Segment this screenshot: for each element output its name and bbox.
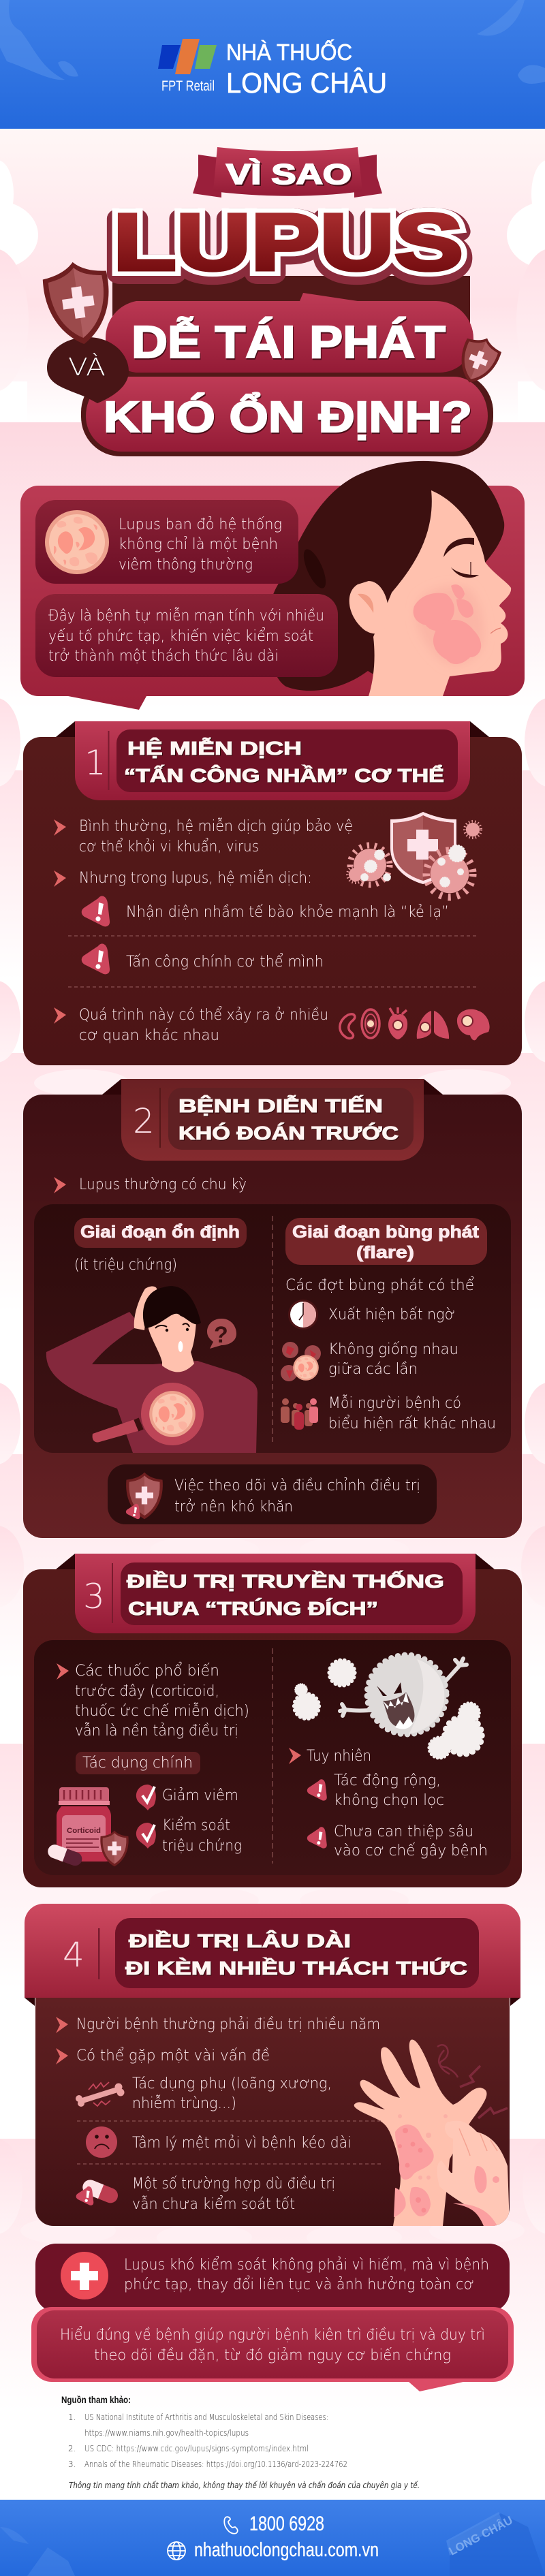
item: fatigue: Tâm lý mệt mỏi vì bệnh kéo dài	[132, 2135, 352, 2152]
banner: Khó ổn định	[81, 373, 493, 456]
bubble: Và	[47, 337, 129, 403]
intro panel	[20, 461, 525, 710]
flare stage label	[285, 1218, 487, 1265]
ribbon: Vì sao: VÌ SAO	[226, 158, 352, 190]
phone contact	[224, 2513, 324, 2535]
text box: autoimmune: trở thành một thách thức lâu dài	[48, 648, 279, 665]
illustration: confused man with magnifier	[46, 1286, 258, 1453]
bullet: common drugs: vẫn là nền tảng điều trị	[75, 1723, 238, 1740]
website contact: nhathuoclongchau.com.vn	[194, 2539, 379, 2561]
section 4 heading: ĐIỀU TRỊ LÂU DÀI	[129, 1930, 351, 1951]
section 3 panel	[23, 1554, 522, 1887]
bullet: organs	[54, 1006, 328, 1044]
section 1 panel	[23, 721, 522, 1065]
section 2 heading: BỆNH DIỄN TIẾN	[178, 1095, 383, 1116]
warning: not deep: Chưa can thiệp sâu	[334, 1823, 473, 1840]
conclusion box: understanding	[31, 2307, 514, 2391]
references: Annals of the Rheumatic Diseases: https://doi.org/10.1136/ard-2023-224762	[84, 2460, 347, 2469]
icon: corticoid bottle	[46, 1787, 129, 1868]
comparison panel	[34, 1204, 511, 1453]
treatment panel	[34, 1640, 511, 1875]
text box: definition: viêm thông thường	[119, 556, 253, 574]
banner: Dễ tái phát	[106, 293, 473, 373]
text box: definition: không chỉ là một bệnh	[119, 536, 278, 553]
icon: small shield	[452, 331, 505, 390]
section 4 heading: 4	[63, 1935, 84, 1975]
bullet: however: Tuy nhiên	[307, 1748, 371, 1765]
footer band	[0, 2500, 545, 2576]
text box: definition	[35, 500, 298, 584]
references: US CDC: https://www.cdc.gov/lupus/signs-symptoms/index.html	[84, 2444, 309, 2453]
references: 3.	[68, 2460, 76, 2469]
warning: not deep	[307, 1823, 488, 1859]
stable stage label: Giai đoạn ổn định	[80, 1223, 240, 1242]
effect: anti-inflammatory	[136, 1785, 238, 1810]
phone contact: 1800 6928	[249, 2513, 324, 2535]
effect: symptom control: Kiểm soát	[162, 1817, 230, 1834]
illustration: immune cell monster	[294, 1655, 482, 1758]
ribbon: Vì sao	[193, 147, 382, 198]
text box: autoimmune: Đây là bệnh tự miễn mạn tính với nhiều	[48, 608, 324, 625]
item: poor control: vẫn chưa kiểm soát tốt	[132, 2195, 295, 2213]
label: main effects: Tác dụng chính	[82, 1755, 193, 1772]
bullet: cycle: Lupus thường có chu kỳ	[79, 1176, 247, 1193]
illustration: hands with rash	[354, 2039, 510, 2226]
logo: FPT Retail: FPT Retail	[161, 78, 215, 94]
conclusion box: understanding: Hiểu đúng về bệnh giúp người bệnh kiên trì điều trị và duy trì	[60, 2326, 485, 2344]
item: side effects: Tác dụng phụ (loãng xương,	[132, 2075, 332, 2092]
conclusion box: complex disease	[35, 2244, 510, 2312]
callout: follow-up difficult: Việc theo dõi và điều chỉnh điều trị	[174, 1477, 420, 1494]
bubble: Và: VÀ	[68, 353, 106, 381]
section 1 heading: “TẤN CÔNG NHẦM” CƠ THỂ	[124, 764, 444, 786]
bullet: organs: Quá trình này có thể xảy ra ở nhiều	[79, 1006, 328, 1024]
effect: symptom control: triệu chứng	[162, 1838, 242, 1855]
conclusion box: complex disease: phức tạp, thay đổi liên tục và ảnh hưởng toàn cơ	[124, 2276, 474, 2293]
logo: FPT Retail	[158, 39, 217, 94]
flare stage label: Giai đoạn bùng phát	[292, 1223, 480, 1242]
banner: Dễ tái phát: DỄ TÁI PHÁT	[131, 317, 446, 368]
bullet: common drugs: trước đây (corticoid,	[75, 1683, 219, 1700]
section 4 heading: ĐI KÈM NHIỀU THÁCH THỨC	[125, 1958, 467, 1979]
magnifier	[93, 1383, 204, 1445]
section 4 panel	[25, 1904, 520, 2226]
stable stage label	[74, 1218, 247, 1248]
section 4 heading	[25, 1904, 520, 1998]
banner: Khó ổn định: KHÓ ỔN ĐỊNH?	[104, 392, 472, 441]
item: different per patient	[281, 1395, 496, 1432]
LUPUS word: LUPUS	[113, 198, 463, 287]
warning: attack: Tấn công chính cơ thể mình	[126, 953, 324, 971]
section 3 heading: CHƯA “TRÚNG ĐÍCH”	[128, 1598, 378, 1619]
bullet: protection	[54, 818, 353, 855]
references: Thông tin mang tính chất tham khảo, không thay thế lời khuyên và chẩn đoán của chuyên gia y tế.	[69, 2481, 420, 2490]
item: varies: Không giống nhau	[328, 1341, 458, 1358]
item: side effects	[76, 2075, 332, 2112]
icon: skin rash	[45, 510, 109, 574]
references: Nguồn tham khảo:	[61, 2395, 131, 2405]
section 2 heading: 2	[133, 1101, 155, 1141]
icon: corticoid bottle: Corticoid	[67, 1827, 101, 1835]
item: different per patient: Mỗi người bệnh có	[328, 1395, 461, 1412]
item: poor control: Một số trường hợp dù điều trị	[132, 2176, 335, 2193]
warning: misidentify	[82, 896, 449, 926]
label: main effects	[76, 1752, 200, 1774]
flare intro text: Các đợt bùng phát có thể	[285, 1276, 474, 1294]
item: different per patient: biểu hiện rất khác nhau	[328, 1415, 496, 1432]
item: poor control	[76, 2176, 335, 2213]
effect: symptom control	[136, 1817, 242, 1855]
item: sudden onset: Xuất hiện bất ngờ	[328, 1306, 455, 1323]
text box: definition: Lupus ban đỏ hệ thống	[119, 516, 282, 533]
conclusion box: complex disease: Lupus khó kiểm soát không phải vì hiếm, mà vì bệnh	[124, 2256, 489, 2274]
effect: anti-inflammatory: Giảm viêm	[162, 1787, 238, 1804]
bullet: organs: cơ quan khác nhau	[79, 1027, 219, 1044]
item: fatigue	[86, 2126, 352, 2158]
section 3 heading: ĐIỀU TRỊ TRUYỀN THỐNG	[127, 1570, 444, 1592]
references: US National Institute of Arthritis and Musculoskeletal and Skin Diseases:	[84, 2413, 328, 2422]
warning: broad effect: Tác động rộng,	[334, 1772, 441, 1789]
callout: follow-up difficult: trở nên khó khăn	[174, 1498, 293, 1515]
header band	[0, 0, 545, 129]
section 2 panel	[23, 1079, 522, 1538]
bullet: problems: Có thể gặp một vài vấn đề	[76, 2047, 270, 2064]
warning: broad effect	[307, 1772, 444, 1809]
bullet: in lupus: Nhưng trong lupus, hệ miễn dịch:	[79, 870, 312, 887]
section 1 heading	[75, 721, 470, 800]
bullet: common drugs: Các thuốc phổ biến	[75, 1662, 219, 1680]
icons: organs	[340, 1007, 490, 1040]
LUPUS word: LUPUS	[113, 202, 463, 292]
LUPUS word: LUPUS	[113, 198, 463, 287]
illustration: shield and viruses	[347, 812, 481, 897]
flare stage label: (flare)	[356, 1243, 414, 1262]
item: varies	[281, 1341, 458, 1381]
warning: broad effect: không chọn lọc	[334, 1792, 444, 1809]
bullet: protection: cơ thể khỏi vi khuẩn, virus	[79, 838, 259, 855]
logo: Nhà thuốc Long Châu	[226, 39, 387, 99]
conclusion box: understanding: theo dõi đều đặn, từ đó giảm nguy cơ biến chứng	[94, 2347, 451, 2364]
warning: not deep: vào cơ chế gây bệnh	[334, 1842, 488, 1859]
dark backing block	[112, 276, 470, 381]
icon: medical cross	[61, 2252, 108, 2299]
bullet: long treatment: Người bệnh thường phải điều trị nhiều năm	[76, 2016, 380, 2033]
section 2 heading	[121, 1079, 424, 1161]
item: side effects: nhiễm trùng...)	[132, 2095, 236, 2112]
item: sudden onset	[288, 1300, 455, 1330]
section 1 heading: 1	[84, 743, 106, 783]
icon: large shield	[40, 257, 116, 349]
references: 2.	[68, 2444, 76, 2453]
stable stage note: (ít triệu chứng)	[74, 1257, 177, 1274]
warning: misidentify: Nhận diện nhầm tế bào khỏe mạnh là “kẻ lạ”	[126, 904, 449, 921]
warning: attack	[82, 943, 324, 974]
logo: Nhà thuốc Long Châu: NHÀ THUỐC	[226, 39, 352, 65]
section 3 heading	[75, 1554, 476, 1633]
section 1 heading: HỆ MIỄN DỊCH	[127, 738, 302, 759]
logo: Nhà thuốc Long Châu: LONG CHÂU	[226, 67, 387, 99]
icon: question bubble	[207, 1319, 236, 1349]
bullet: protection: Bình thường, hệ miễn dịch giúp bảo vệ	[79, 818, 353, 835]
references: 1.	[68, 2413, 76, 2422]
bullet: common drugs: thuốc ức chế miễn dịch)	[75, 1703, 249, 1720]
text box: autoimmune: yếu tố phức tạp, khiến việc kiểm soát	[48, 627, 313, 645]
storefront sign: LONG CHÂU	[447, 2513, 515, 2558]
references: https://www.niams.nih.gov/health-topics/lupus	[84, 2428, 249, 2438]
item: varies: giữa các lần	[328, 1361, 418, 1378]
illustration: woman with butterfly rash	[267, 461, 511, 696]
title block	[40, 147, 505, 456]
references	[61, 2395, 420, 2490]
callout: follow-up difficult	[108, 1464, 437, 1524]
section 2 heading: KHÓ ĐOÁN TRƯỚC	[178, 1122, 399, 1144]
bullet: common drugs	[57, 1662, 249, 1740]
text box: autoimmune	[35, 594, 338, 677]
icon: question bubble: ?	[214, 1322, 228, 1348]
section 3 heading: 3	[83, 1577, 105, 1616]
